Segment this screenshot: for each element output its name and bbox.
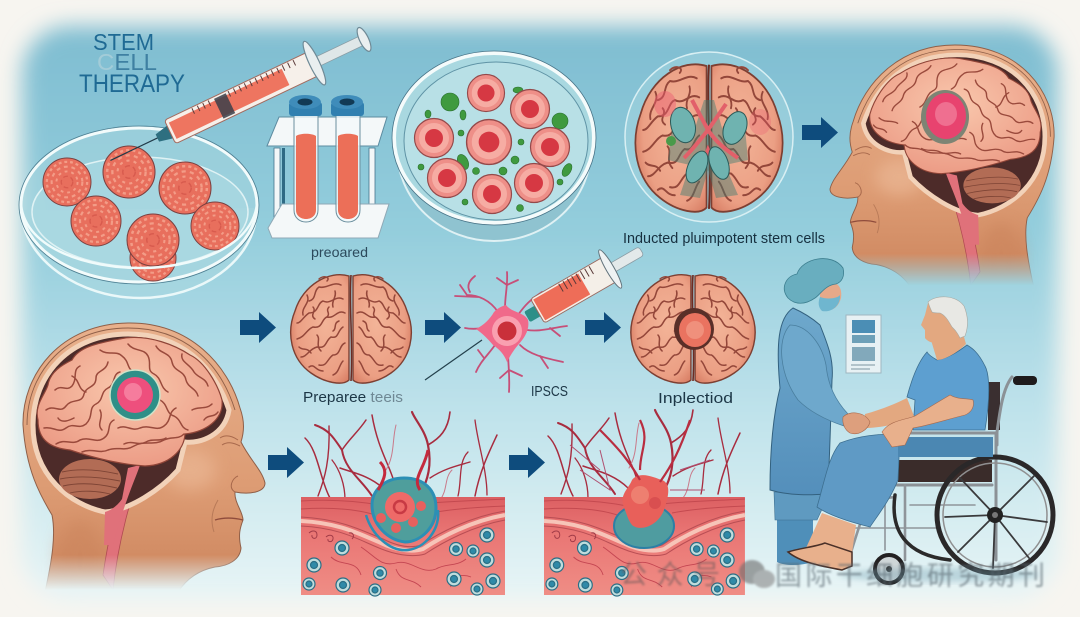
brain cross-section in sphere [625,52,793,222]
arrow [240,312,276,343]
petri dish with iPS cells [392,51,596,241]
watermark: 国际干细胞研究期刊 [775,561,1045,591]
head profile with tumour, lower left [23,323,265,600]
syringe 2 [516,232,652,336]
legs [806,513,856,553]
arrow [425,312,461,343]
gown skirt [817,434,900,527]
tunic lower layer [774,492,830,520]
arrow [509,447,545,478]
pants [777,518,813,565]
tumour [921,90,969,144]
syringe injecting spheroid [100,16,378,182]
title [79,29,185,98]
clasped hands [843,413,870,434]
neuron stem cell [425,272,567,392]
title: THERAPY [79,70,185,98]
label: prepared: preoared [311,244,368,260]
green particles [418,87,574,212]
white hair [928,297,968,338]
spheroid hidden under rim [130,235,176,281]
petri dish with cell spheroids [19,126,259,298]
label: iPSCs: IPSCS [531,384,568,400]
stem cells [467,74,505,112]
tissue with integrated graft [544,410,745,596]
tube 2 [331,95,364,222]
face and mask [820,280,841,310]
test tube rack [267,95,389,238]
rear back wheel [894,495,950,560]
patient [788,297,993,570]
tissue with stem cell graft [301,412,505,596]
arrow [802,117,838,148]
watermark [620,560,1045,591]
head profile with tumour, upper right [830,45,1054,294]
label: injected: Inplectiod [658,390,733,407]
caster wheel [875,555,903,583]
arrow [268,447,304,478]
wall poster [846,315,881,373]
watermark: 公众号 [620,560,720,590]
arrow [585,312,621,343]
ground shadow [840,568,1040,582]
shirt [907,345,989,430]
sleeve [782,325,848,426]
title: CELL [97,49,157,75]
forearm and hand [882,395,973,447]
tube 1 [289,95,322,222]
seat cushion [898,437,993,457]
title: STEM [93,29,154,55]
gown [770,308,832,495]
surgical cap [784,259,844,303]
neck and face [931,322,966,360]
wheelchair [847,376,1053,583]
brain with injected site [631,275,755,383]
nurse [770,259,848,565]
label: prepare cells: Preparee teeis [303,390,403,406]
feet [788,543,852,570]
label: induced pluripotent stem cells: Inducted pluimpotent stem cells [623,231,825,247]
main wheel [937,457,1053,573]
arm [864,398,914,428]
tumour [110,370,160,420]
brain top view [291,275,411,383]
